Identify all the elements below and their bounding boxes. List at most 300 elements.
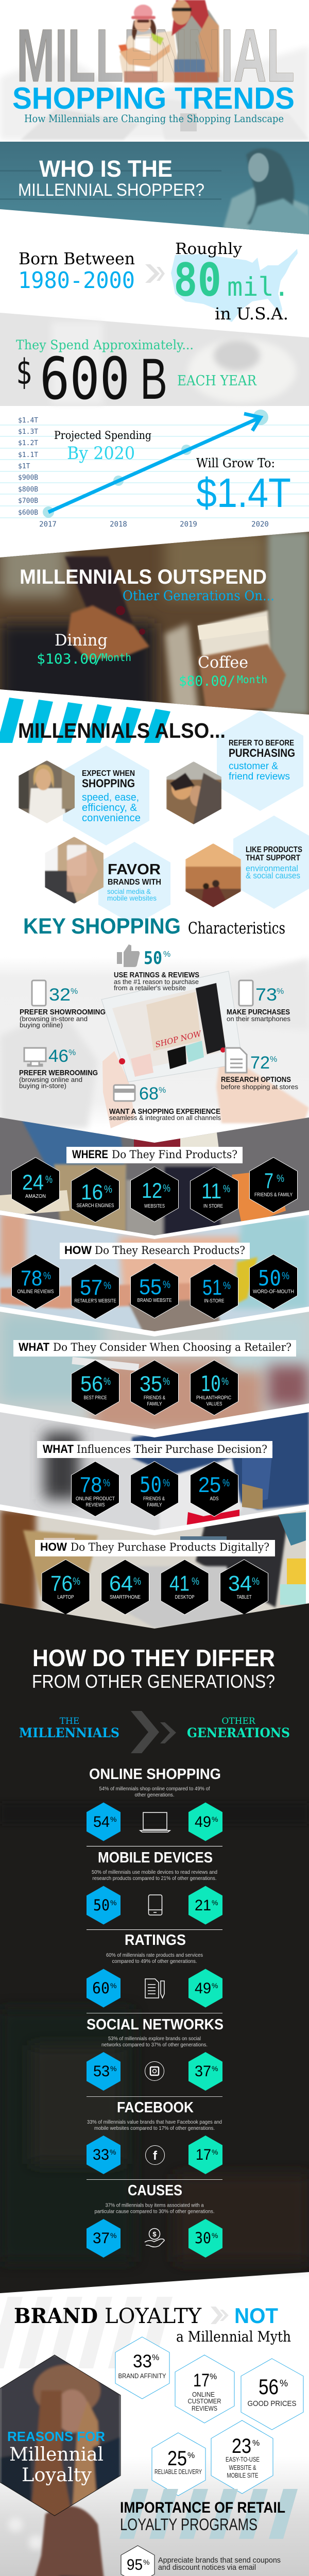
comparison: social networks: % (212, 2064, 218, 2073)
comparison: social networks: SOCIAL NETWORKS (87, 2016, 224, 2033)
heading: Characteristics: Characteristics (188, 919, 285, 938)
stat: coffee: $80.00 (179, 673, 227, 689)
stat: 95 percent (121, 2546, 281, 2576)
hex: 55 brand website: % (163, 1279, 170, 1291)
icon: phone (32, 980, 46, 1006)
stat: 46 percent webrooming: 46 (48, 1046, 68, 1066)
heading: WHERE: WHERE (72, 1148, 108, 1161)
hex: 56 best price: % (104, 1376, 111, 1387)
hex: 33 brand affinity: % (152, 2353, 159, 2362)
hex: 64 smartphone: 64 (109, 1571, 133, 1595)
heading: HOW: HOW (64, 1244, 92, 1257)
heading box (13, 1340, 296, 1357)
callout: refer to before purchasing (229, 739, 295, 782)
stat: 95 percent: 95 (127, 2556, 143, 2573)
hex: 78 online product reviews (71, 1461, 119, 1517)
icon: thumbs up (117, 944, 140, 967)
panel: age and population facts (18, 240, 298, 324)
data markers (43, 410, 268, 518)
comparison: facebook: FACEBOOK (117, 2099, 194, 2116)
hex: 25 reliable delivery (152, 2433, 205, 2496)
hex: 17 online customer reviews: CUSTOMER (187, 2397, 221, 2405)
comparison: ratings: RATINGS (125, 1932, 186, 1948)
hex: 10 philanthropic values: 10 (200, 1371, 221, 1396)
hex: 78 online reviews: ONLINE REVIEWS (18, 1289, 54, 1295)
hex: 56 best price: 56 (80, 1371, 103, 1396)
legend: the millennials: MILLENNIALS (19, 1725, 119, 1740)
comparison: social networks (87, 2016, 224, 2097)
hex: 50 word of mouth: WORD-OF-MOUTH (253, 1289, 294, 1295)
stat: 72 percent research: 72 (250, 1053, 270, 1073)
hex: 64 smartphone: SMARTPHONE (110, 1595, 141, 1600)
stat: 73 percent smartphones: 73 (255, 985, 277, 1005)
panel: what influences purchase (0, 1412, 309, 1530)
axis labels: values: $1.1T (18, 451, 38, 459)
hex: 24 amazon: % (45, 1174, 53, 1185)
hex: 50 friends and family: FRIENDS & (143, 1496, 165, 1502)
stat: 68 percent seamless experience (109, 1084, 221, 1122)
panel: key shopping characteristics (0, 914, 309, 1128)
comparison: social networks: 53 (93, 2063, 110, 2080)
stat: 50 percent ratings: USE RATINGS & REVIEWS (114, 971, 199, 979)
heading box (37, 1441, 272, 1458)
heading box (60, 1243, 250, 1259)
comparison: causes: 30 (195, 2229, 211, 2247)
hex: 17 online customer reviews: ONLINE (192, 2391, 215, 2398)
photo hex: couple at sunset (185, 843, 241, 909)
hex: 57 retailer website: % (104, 1280, 111, 1292)
hex: 23 easy to use website: EASY-TO-USE (226, 2456, 260, 2463)
heading: HOW: Do They Research Products? (95, 1244, 245, 1257)
callout: expect when shopping: efficiency, & (82, 802, 138, 814)
stat: coffee: / (227, 673, 235, 689)
legend: the millennials (19, 1716, 119, 1740)
hex: 50 word of mouth: % (282, 1270, 289, 1282)
panel: brand loyalty (0, 2297, 303, 2516)
callout: refer to before purchasing: PURCHASING (229, 747, 295, 759)
stat: 68 percent seamless experience: % (159, 1086, 166, 1095)
hex: 17 online customer reviews (175, 2355, 234, 2423)
hex: 50 word of mouth: 50 (258, 1266, 281, 1291)
unit: mil.: mil. (227, 272, 289, 302)
hex: 7 friends and family: % (277, 1173, 284, 1184)
stat: 32 percent showrooming: buying online) (20, 1021, 63, 1029)
hex: 12 websites: WEBSITES (144, 1204, 165, 1209)
callout: refer to before purchasing: friend reviews (229, 771, 290, 782)
comparison: ratings: compared to 49% of other generations. (112, 1958, 197, 1964)
callout: like products (246, 845, 302, 880)
axis labels: years: 2018 (110, 520, 127, 529)
panel: how do they differ (0, 1603, 309, 2293)
comparison: online shopping: 54% of millennials shop online compared to 49% of (99, 1786, 210, 1792)
stat: 50 percent ratings: 50 (144, 948, 162, 969)
hex: 78 online reviews: 78 (21, 1266, 42, 1290)
text: Born Between: Born Between (19, 249, 135, 268)
panel: how do they purchase digitally (0, 1510, 309, 1631)
comparison: social networks: 37 (195, 2063, 211, 2080)
comparison: ratings: 49 (195, 1980, 211, 1997)
comparison: causes: % (212, 2231, 218, 2240)
stat: 32 percent showrooming: 32 (49, 985, 71, 1005)
number: 600B: 600 (40, 346, 130, 413)
heading box (35, 1540, 275, 1556)
callout: expect when shopping: EXPECT WHEN (82, 769, 135, 778)
hex: 50 friends and family: % (163, 1478, 170, 1489)
comparison: mobile devices (87, 1850, 222, 1930)
stat: 46 percent webrooming: % (68, 1048, 76, 1057)
stat: 50 percent ratings: % (163, 950, 170, 959)
icon: facebook (145, 2145, 165, 2165)
number: 600B (16, 346, 167, 413)
hex: 55 brand website: BRAND WEBSITE (137, 1298, 172, 1303)
hex: 12 websites (131, 1166, 178, 1222)
hex: 35 friends and family: FAMILY (147, 1401, 162, 1407)
panel: loyalty programs background photo (0, 2471, 309, 2576)
comparison: social networks: networks compared to 37% of other generations. (101, 2042, 208, 2048)
axis labels: years (39, 520, 269, 529)
hex: 25 ads: % (222, 1478, 230, 1489)
heading: WHO IS THE: WHO IS THE (39, 156, 173, 182)
stat: coffee: Month (237, 673, 267, 686)
stat: 73 percent smartphones: on their smartphones (227, 1015, 291, 1023)
comparison: online shopping: 54 (93, 1814, 110, 1831)
text: They Spend Approximately: They Spend Approximately... (16, 337, 194, 352)
illustration: tablet with hands (101, 971, 309, 1128)
hex: 24 amazon: AMAZON (25, 1194, 46, 1199)
heading: HOW DO THEY DIFFER: HOW DO THEY DIFFER (32, 1645, 275, 1671)
hex: 10 philanthropic values (191, 1360, 238, 1415)
hex: 51 in-store: 51 (202, 1275, 222, 1299)
hex: 16 search engines (71, 1167, 119, 1222)
heading: WHAT: Do They Consider When Choosing a Retailer? (53, 1341, 291, 1353)
stat: 46 percent webrooming (19, 1046, 98, 1090)
heading: BRAND LOYALTY: LOYALTY (105, 2304, 202, 2328)
comparison: online shopping: other generations. (135, 1792, 174, 1798)
callout: like products: & social causes (246, 871, 300, 880)
axis labels: values: $800B (18, 486, 38, 494)
panel: millennials outspend (0, 531, 309, 716)
hex: 33 brand affinity: BRAND AFFINITY (118, 2372, 166, 2380)
comparison: mobile devices: % (110, 1899, 116, 1907)
heading: WHAT: WHAT (19, 1341, 50, 1353)
text: Will Grow To: Will Grow To: (196, 456, 275, 470)
axis labels: values (18, 417, 38, 517)
heading: MILLENNIALS OUTSPEND: MILLENNIALS OUTSPEND (20, 566, 267, 588)
hex: 41 desktop: % (192, 1576, 199, 1587)
icon: document and pen (145, 1979, 164, 1998)
hex: 50 friends and family: FAMILY (147, 1502, 162, 1508)
hex: 56 good prices: % (280, 2378, 288, 2388)
legend: other generations: OTHER (221, 1716, 256, 1726)
hex: 34 tablet: % (252, 1576, 260, 1587)
stat: 32 percent showrooming: (browsing in-store and (20, 1015, 88, 1023)
comparison: online shopping: % (110, 1815, 116, 1823)
hex: 11 in store: 11 (201, 1179, 221, 1203)
hex: 24 amazon: 24 (22, 1170, 44, 1194)
hex: 23 easy to use website: % (252, 2439, 260, 2448)
comparison: online shopping: % (212, 1815, 218, 1823)
hex: 51 in-store: % (223, 1280, 231, 1292)
comparison: facebook: 33 (93, 2146, 109, 2163)
callout: expect when shopping: SHOPPING (82, 777, 135, 790)
photo hex: laptop and phone (45, 837, 104, 904)
comparison: mobile devices: % (212, 1899, 218, 1907)
hex: 34 tablet (220, 1560, 268, 1615)
heading: KEY SHOPPING: KEY SHOPPING (23, 914, 181, 939)
hex: 33 brand affinity: 33 (133, 2351, 152, 2371)
heading: BRAND LOYALTY: BRAND (14, 2304, 98, 2328)
callout: favor brands: FAVOR (108, 861, 161, 878)
heading: a Millennial Myth: a Millennial Myth (176, 2328, 291, 2345)
panel: importance of retail loyalty programs (83, 2489, 300, 2576)
text: Roughly: Roughly (175, 240, 242, 258)
stat: 73 percent smartphones: % (277, 987, 284, 996)
subheading: Other Generations On... (123, 588, 274, 604)
panel: millennials also (0, 698, 309, 925)
panel: how do they research products (0, 1213, 309, 1334)
icon: monitor (24, 1048, 46, 1066)
hex: 57 retailer website: RETAILER'S WEBSITE (74, 1298, 116, 1304)
stat: 72 percent research: % (270, 1055, 277, 1064)
text: reasons for millennial loyalty: Loyalty (22, 2465, 92, 2486)
arrow: chevrons (211, 2307, 229, 2324)
text: in USA: in U.S.A. (215, 304, 288, 324)
comparison: mobile devices: 50% of millennials use mobile devices to read reviews and (92, 1869, 217, 1875)
heading: MILLENNIAL SHOPPER?: MILLENNIAL SHOPPER? (18, 180, 204, 200)
callout: like products: environmental (246, 863, 298, 873)
hex: 7 friends and family: 7 (264, 1168, 273, 1193)
title: SHOPPING TRENDS: SHOPPING TRENDS (12, 81, 295, 115)
photo: two women shopping (118, 0, 219, 82)
hex: 25 reliable delivery: 25 (167, 2447, 187, 2470)
stat: 95 percent: Appreciate brands that send coupons (158, 2556, 281, 2565)
callout: expect when shopping (82, 769, 141, 824)
callout: favor brands: mobile websites (107, 894, 157, 902)
illustration: tablet with hands: SHOP NOW (154, 1029, 203, 1049)
comparison: mobile devices: 50 (93, 1896, 110, 1914)
stat: 46 percent webrooming: buying in-store) (19, 1082, 66, 1090)
axis labels: values: $1T (18, 463, 30, 470)
axis labels: values: $1.4T (18, 417, 38, 425)
stat: 50 percent ratings: as the #1 reason to purchase (114, 978, 199, 986)
comparison: causes: 37 (93, 2230, 110, 2247)
icon: tablet (148, 1895, 162, 1915)
hex: 16 search engines: % (104, 1184, 112, 1195)
comparison: causes: $ (152, 2230, 157, 2238)
heading: WHAT influences: Influences Their Purchase Decision? (77, 1443, 267, 1455)
stat: dining: Dining (55, 631, 108, 650)
heading: NOT: NOT (234, 2303, 278, 2328)
stat: 46 percent webrooming: PREFER WEBROOMING (19, 1069, 98, 1077)
stat: 72 percent research: before shopping at stores (221, 1083, 298, 1091)
heading: WHERE: Do They Find Products? (112, 1148, 237, 1161)
heading: BRAND LOYALTY (14, 2304, 202, 2328)
photo hex: woman with phone (19, 760, 75, 824)
hex: 76 laptop: 76 (50, 1571, 73, 1595)
hex: 56 best price (71, 1360, 119, 1415)
hex: 17 online customer reviews: REVIEWS (192, 2404, 217, 2412)
number: 1.4T: $1.4T (196, 470, 291, 516)
panel: annual spending (0, 313, 309, 413)
comparison: social networks: 53% of millennials explore brands on social (108, 2036, 201, 2042)
icon: instagram (145, 2062, 164, 2080)
hex: 35 friends and family (131, 1360, 178, 1415)
hex: 12 websites: 12 (142, 1178, 162, 1202)
number: birth years: 1980-2000 (18, 267, 135, 294)
hex: 25 reliable delivery: % (187, 2451, 195, 2460)
callout: expect when shopping: speed, ease, (82, 792, 139, 803)
arrow: chevrons (131, 1711, 176, 1753)
comparison: facebook (87, 2099, 222, 2180)
legend: the millennials: THE (60, 1716, 79, 1726)
stat: 73 percent smartphones: MAKE PURCHASES (227, 1008, 290, 1016)
text: Projected Spending: Projected Spending (54, 429, 151, 442)
hex: 57 retailer website (71, 1264, 119, 1319)
comparison: online shopping (87, 1766, 222, 1846)
hex: 25 ads: ADS (210, 1496, 219, 1502)
heading: LOYALTY PROGRAMS: LOYALTY PROGRAMS (120, 2515, 258, 2534)
heading: HOW digitally: Do They Purchase Products Digitally? (71, 1541, 269, 1553)
comparison: social networks: % (110, 2064, 116, 2073)
stat: 68 percent seamless experience: 68 (139, 1084, 159, 1104)
number: 600B: $ (16, 352, 32, 393)
hex: 56 good prices: 56 (259, 2375, 279, 2399)
axis labels: years: 2020 (251, 520, 269, 529)
hex: 33 brand affinity (115, 2337, 169, 2399)
icon: hand with coin (145, 2229, 164, 2247)
hex: 57 retailer website: 57 (80, 1275, 102, 1299)
stat: 72 percent research: RESEARCH OPTIONS (221, 1075, 291, 1084)
hex: 23 easy to use website: WEBSITE & (229, 2464, 256, 2471)
axis labels: values: $600B (18, 509, 38, 517)
hex: 64 smartphone (101, 1560, 149, 1615)
legend: other generations: GENERATIONS (187, 1725, 290, 1740)
stat: 73 percent smartphones (227, 980, 291, 1023)
stat: coffee (179, 653, 267, 689)
comparison: ratings: % (110, 1981, 116, 1990)
hex: 23 easy to use website: MOBILE SITE (227, 2472, 259, 2479)
hex: 10 philanthropic values: % (221, 1376, 229, 1387)
hex: 16 search engines: SEARCH ENGINES (76, 1203, 114, 1209)
comparison: facebook: 17 (196, 2146, 211, 2163)
hex: 56 good prices (241, 2359, 303, 2430)
stat: dining: Month (101, 651, 131, 664)
comparison: ratings: 60 (92, 1979, 110, 1997)
panel: what do they consider (0, 1311, 309, 1432)
hex: 78 online product reviews: % (103, 1478, 110, 1489)
number: 600B: B (140, 347, 167, 411)
comparison: mobile devices: 21 (195, 1897, 211, 1914)
stat: 32 percent showrooming: % (71, 987, 78, 996)
panel: where do they find products (0, 1115, 309, 1239)
callout: favor brands: social media & (107, 887, 151, 895)
comparison: facebook: mobile websites compared to 17% of other generations. (94, 2125, 215, 2131)
comparison: facebook: 33% of millennials value brands that have Facebook pages and (87, 2119, 222, 2125)
axis labels: years: 2019 (180, 520, 197, 529)
hex: 50 friends and family (131, 1461, 178, 1517)
comparison: facebook: % (110, 2148, 116, 2156)
callout: like products: THAT SUPPORT (246, 854, 300, 862)
icon: document (226, 1048, 247, 1073)
hex: 78 online product reviews: 78 (80, 1472, 102, 1497)
hex: 78 online reviews (11, 1254, 60, 1310)
heading: FROM OTHER GENERATIONS: FROM OTHER GENERATIONS? (32, 1671, 275, 1692)
stat: 50 percent ratings (114, 944, 199, 992)
comparison: mobile devices: MOBILE DEVICES (98, 1850, 213, 1866)
photo hex: woman in hat (0, 2355, 121, 2516)
arrow: chevrons (145, 264, 165, 283)
hex: 23 easy to use website: 23 (232, 2435, 251, 2458)
arrow: growth line (48, 414, 261, 512)
hex: 50 word of mouth (249, 1254, 298, 1310)
stat: 46 percent webrooming: (browsing online and (19, 1076, 82, 1083)
subtitle: How Millennials are Changing the Shopping Landscape (24, 112, 284, 125)
icon: USA map (171, 249, 298, 322)
stat: 68 percent seamless experience: seamless & integrated on all channels (109, 1114, 221, 1122)
hex: 41 desktop: 41 (169, 1571, 190, 1595)
comparison: online shopping: ONLINE SHOPPING (89, 1766, 221, 1783)
axis labels: values: $700B (18, 497, 38, 505)
hex: 78 online product reviews: REVIEWS (85, 1502, 105, 1508)
comparison: online shopping: 49 (195, 1814, 211, 1831)
hex: 35 friends and family: 35 (140, 1371, 162, 1396)
photo hex: friends laughing (166, 761, 222, 825)
hex: 55 brand website (131, 1263, 178, 1318)
panel: who is the millennial shopper banner (0, 142, 309, 237)
comparison: ratings: % (212, 1981, 218, 1990)
hex: 10 philanthropic values: VALUES (206, 1401, 222, 1407)
callout: expect when shopping: convenience (82, 812, 141, 824)
comparison: causes (87, 2182, 222, 2258)
text: reasons for millennial loyalty (7, 2429, 105, 2486)
callout: favor brands (107, 861, 161, 902)
icon: phone (239, 980, 253, 1006)
text: By 2020: By 2020 (67, 443, 135, 464)
hex: 78 online product reviews: ONLINE PRODUCT (76, 1496, 115, 1502)
stat: dining (37, 631, 131, 667)
hex: 17 online customer reviews: 17 (193, 2370, 210, 2391)
heading box (66, 1147, 243, 1163)
comparison: causes: CAUSES (128, 2182, 182, 2199)
stat: 32 percent showrooming (20, 980, 106, 1029)
hex: 7 friends and family: FRIENDS & FAMILY (254, 1192, 293, 1198)
comparison: causes: % (110, 2231, 116, 2240)
axis labels: years: 2017 (39, 520, 57, 529)
callout: refer to before purchasing: customer & (229, 761, 278, 772)
axis labels: values: $900B (18, 474, 38, 482)
stat: 68 percent seamless experience: WANT A SHOPPING EXPERIENCE (109, 1107, 220, 1116)
comparison: causes: 37% of millennials buy items associated with a (105, 2202, 204, 2208)
stat: 50 percent ratings: from a retailer's website (114, 984, 186, 992)
comparison: mobile devices: research products compared to 21% of other generations. (93, 1875, 216, 1882)
axis labels: values: $1.2T (18, 439, 38, 447)
hex: 76 laptop: LAPTOP (58, 1595, 74, 1600)
comparison: causes: particular cause compared to 30% of other generations. (95, 2208, 214, 2214)
hex: 25 ads (191, 1461, 238, 1517)
number: 80 mil: 80 (174, 253, 221, 307)
hex: 24 amazon (11, 1157, 60, 1213)
icon: facebook: f (153, 2149, 158, 2163)
stat: 32 percent showrooming: PREFER SHOWROOMING (20, 1008, 106, 1016)
hex: 25 ads: 25 (198, 1472, 221, 1497)
legend: other generations (187, 1716, 290, 1740)
hex: 34 tablet: TABLET (237, 1595, 251, 1600)
hex: 12 websites: % (163, 1183, 170, 1194)
hex stroke: woman photo outline (0, 2355, 121, 2516)
hex: 10 philanthropic values: PHILANTHROPIC (196, 1395, 231, 1401)
comparison: ratings (87, 1932, 222, 2013)
stat: dining: / (94, 651, 102, 667)
